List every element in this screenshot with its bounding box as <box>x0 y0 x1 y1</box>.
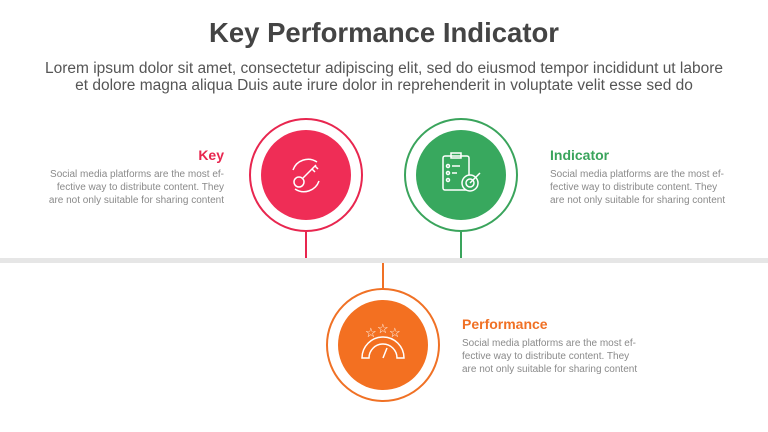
performance text <box>462 338 638 375</box>
key text: Social media platforms are the most ef- <box>50 169 224 180</box>
performance label: Performance <box>462 316 548 332</box>
indicator text: are not only suitable for sharing content <box>550 195 725 206</box>
performance circle: ☆ <box>365 325 377 340</box>
key text <box>49 169 224 206</box>
performance circle <box>327 263 439 401</box>
key text: are not only suitable for sharing content <box>49 195 224 206</box>
subtitle: et dolore magna aliqua Duis aute irure dolor in reprehenderit in voluptate velit esse sed do <box>75 77 693 94</box>
indicator circle <box>405 119 517 258</box>
title: Key Performance Indicator <box>209 17 559 48</box>
performance text: Social media platforms are the most ef- <box>462 338 636 349</box>
indicator text: fective way to distribute content. They <box>550 182 717 193</box>
subtitle: Lorem ipsum dolor sit amet, consectetur adipiscing elit, sed do eiusmod tempor incididunt ut labore <box>45 60 723 77</box>
performance circle: ☆ <box>389 325 401 340</box>
performance circle: ☆ <box>377 321 389 336</box>
subtitle <box>45 60 723 94</box>
indicator text: Social media platforms are the most ef- <box>550 169 724 180</box>
performance text: are not only suitable for sharing content <box>462 364 637 375</box>
key circle <box>250 119 362 258</box>
performance text: fective way to distribute content. They <box>462 351 629 362</box>
indicator label: Indicator <box>550 147 609 163</box>
key text: fective way to distribute content. They <box>57 182 224 193</box>
indicator text <box>550 169 726 206</box>
key label: Key <box>198 147 224 163</box>
